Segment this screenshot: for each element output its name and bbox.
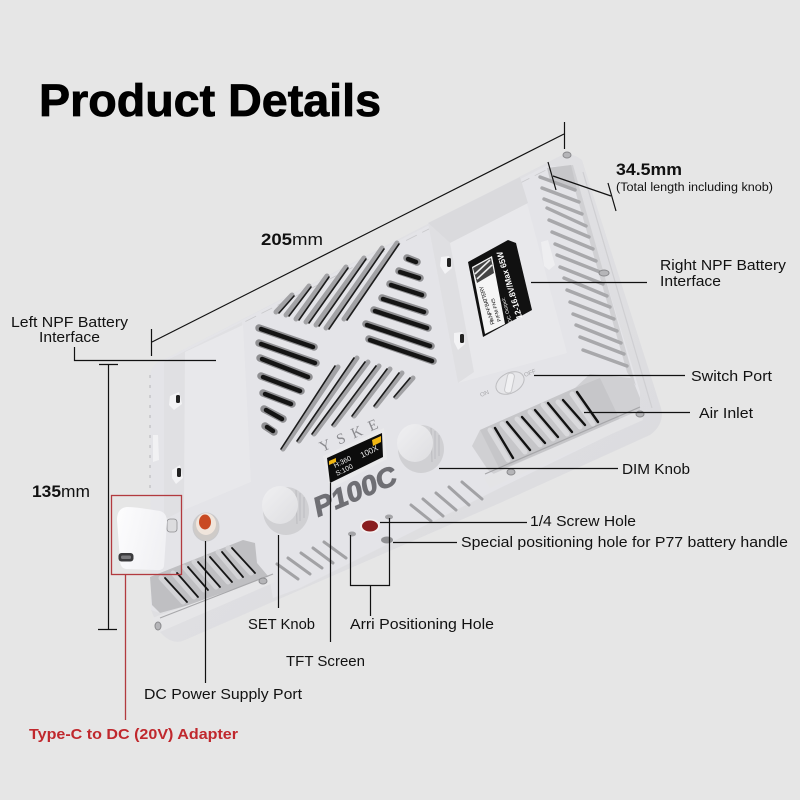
right side inner wall bbox=[547, 165, 636, 386]
callout: 1/4 screw hole: 1/4 Screw Hole bbox=[530, 513, 636, 530]
red highlight box around adapter bbox=[112, 496, 182, 574]
lower-left vent bbox=[150, 540, 275, 632]
callout: SET knob bbox=[248, 535, 315, 633]
dimension: 205mm bbox=[152, 122, 564, 356]
callout: DIM knob: DIM Knob bbox=[622, 461, 690, 478]
callout: special positioning hole: Special positioning hole for P77 battery handle bbox=[461, 534, 788, 551]
device: rear panel of the light bbox=[117, 152, 662, 642]
dimension: 34.5mm: (Total length including knob) bbox=[616, 182, 773, 194]
callout: right battery interface: Right NPF Battery bbox=[660, 257, 787, 274]
callout: left battery interface: Left NPF Battery bbox=[11, 314, 129, 331]
dimension: 34.5mm: 34.5mm bbox=[616, 160, 682, 179]
power switch bbox=[480, 367, 537, 399]
callout: switch port: Switch Port bbox=[691, 368, 773, 385]
dimension: 205mm: 205mm bbox=[261, 230, 323, 249]
right battery recess bbox=[428, 177, 567, 383]
device body outline bbox=[150, 154, 662, 642]
callout: TFT screen: TFT Screen bbox=[286, 653, 365, 670]
air inlet vent bbox=[472, 374, 643, 488]
dimension: 135mm: 135mm bbox=[32, 482, 90, 501]
TFT screen: H:360 bbox=[333, 455, 353, 470]
centre vents: right triangle group bbox=[366, 258, 433, 361]
callout: left battery interface bbox=[11, 314, 216, 360]
callout: Arri positioning hole: Arri Positioning Hole bbox=[350, 616, 494, 633]
top edge seam bbox=[165, 168, 550, 362]
brand name: YSKE bbox=[317, 417, 381, 456]
right rim line bbox=[583, 172, 652, 408]
warning label: DC Output: bbox=[501, 297, 514, 323]
battery clips bbox=[169, 392, 182, 410]
mounting holes bbox=[348, 514, 393, 544]
DC port bbox=[193, 513, 219, 541]
battery clips bbox=[440, 256, 452, 274]
screws bbox=[155, 152, 644, 630]
warning label bbox=[468, 240, 532, 337]
centre vents: bottom diagonal group bbox=[281, 358, 413, 449]
title: Product Details bbox=[39, 75, 381, 126]
Type-C adapter bbox=[117, 507, 177, 570]
warning label: 12-16.8V/Max 65W bbox=[494, 250, 524, 320]
TFT screen: S:100 bbox=[335, 463, 354, 478]
centre vents: left triangle group bbox=[259, 328, 316, 432]
callout: DC power supply port: DC Power Supply Port bbox=[144, 686, 303, 703]
left battery recess bbox=[150, 322, 251, 520]
centre vents: top diagonal group bbox=[276, 243, 399, 329]
right side ribs bbox=[540, 177, 627, 366]
power switch: ON bbox=[480, 390, 490, 399]
callout: left battery interface: Interface bbox=[39, 329, 100, 346]
device main plate bbox=[150, 165, 640, 613]
callout: right battery interface bbox=[531, 257, 787, 290]
power switch: OFF bbox=[524, 369, 537, 379]
callout: SET knob: SET Knob bbox=[248, 616, 315, 633]
small slots bbox=[277, 482, 482, 579]
TFT screen bbox=[323, 428, 387, 489]
dimension: 34.5mm bbox=[548, 160, 773, 211]
model name: P100C bbox=[309, 460, 402, 523]
callout: right battery interface: Interface bbox=[660, 273, 721, 290]
warning label: Fits NP-F BATTERY bbox=[479, 285, 496, 325]
callout: air inlet: Air Inlet bbox=[699, 405, 754, 422]
callout: Arri positioning hole bbox=[350, 518, 494, 633]
TFT screen: 100X bbox=[359, 443, 380, 460]
callout: Type-C to DC adapter: Type-C to DC (20V) Adapter bbox=[29, 726, 238, 743]
SET knob bbox=[262, 486, 309, 535]
DIM knob bbox=[397, 424, 444, 473]
warning label: P/FM-FNS bbox=[490, 297, 503, 322]
